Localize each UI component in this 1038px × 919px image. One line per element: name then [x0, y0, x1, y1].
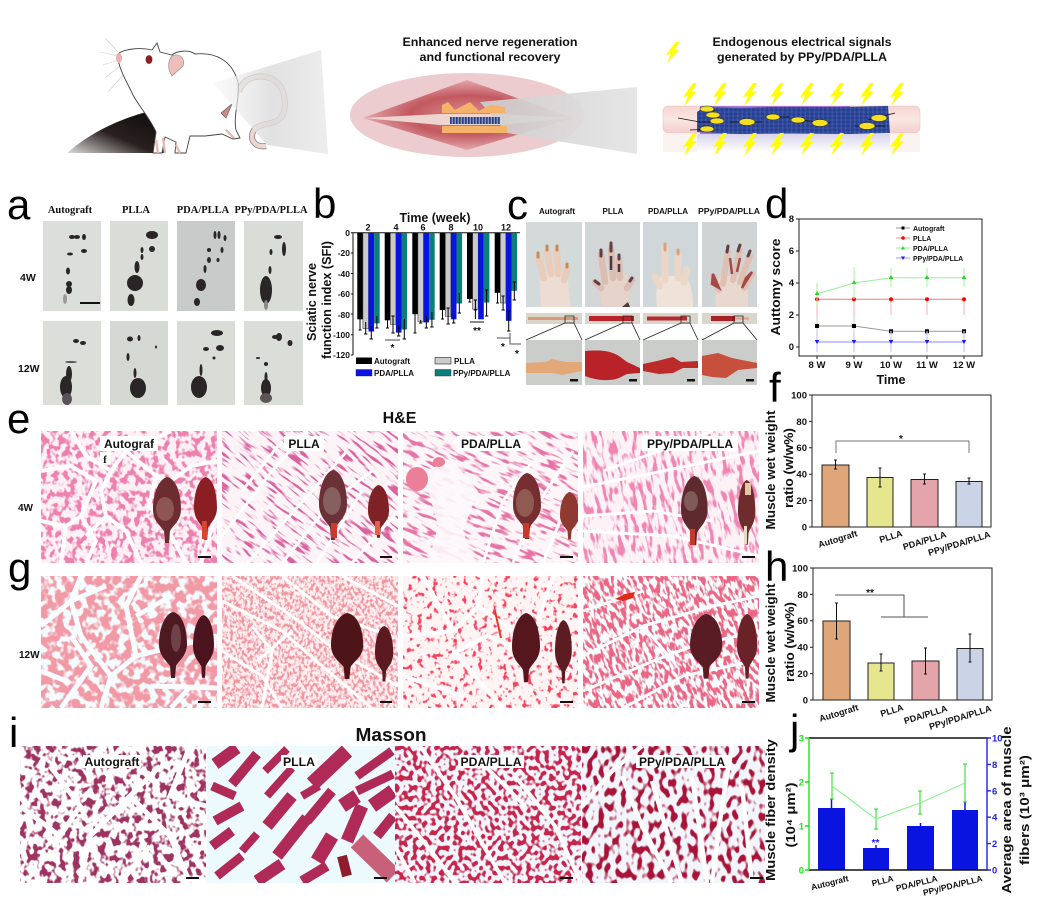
muscle specimens	[331, 613, 393, 681]
row label 12W: 12W	[18, 363, 40, 375]
week labels: 12	[501, 222, 511, 232]
lightning bolts bottom	[683, 133, 904, 156]
week labels: 10	[473, 222, 483, 232]
axons	[678, 108, 895, 130]
rat eye	[146, 55, 152, 64]
category labels: PPy/PDA/PLLA	[922, 873, 983, 898]
row label 12W: 12W	[19, 650, 40, 661]
schematic: wound with scaffold	[350, 73, 637, 157]
left axis title: (10⁴ μm²)	[783, 782, 798, 848]
legend: PDA/PLLA	[374, 369, 414, 378]
column headings: PPy/PDA/PLLA	[698, 207, 760, 216]
series PPy/PDA/PLLA	[815, 331, 966, 352]
footprint 12W autograft	[43, 321, 101, 405]
heading Masson: Masson	[356, 725, 426, 745]
week labels	[365, 222, 511, 232]
panel j: fiber density and area chart	[763, 706, 1032, 898]
pink tube	[663, 106, 920, 133]
axis ticks	[796, 219, 964, 359]
muscle specimens	[512, 613, 572, 683]
week labels: 2	[365, 222, 371, 232]
legend: PDA/PLLA	[913, 246, 948, 253]
significance bracket	[835, 588, 928, 617]
chart title: Time (week)	[400, 210, 470, 225]
scale bar	[742, 556, 755, 558]
y axis title	[763, 583, 797, 702]
image labels	[100, 436, 738, 466]
y axis ticks: -40	[338, 269, 350, 279]
left axis: 2	[799, 778, 804, 788]
y axis ticks: -20	[338, 248, 350, 258]
histology PDA/PLLA 12W	[403, 576, 578, 708]
panel c: paws and nerve photos	[507, 181, 760, 385]
green density line	[830, 764, 967, 829]
y axis ticks: -120	[333, 350, 350, 360]
rat feet	[156, 130, 234, 153]
legend: PLLA	[454, 357, 475, 366]
schematic: rat model with nerve implant	[67, 38, 328, 154]
panel f: muscle wet weight 4W	[763, 364, 992, 558]
legend: Autograft	[374, 357, 410, 366]
panel b: sciatic function index chart	[304, 180, 521, 378]
y ticks: 80	[797, 590, 808, 601]
left axis: 0	[799, 866, 804, 876]
bars	[818, 808, 978, 870]
rat incision	[221, 104, 232, 118]
image labels: PPy/PDA/PLLA	[647, 437, 733, 451]
panel g: H&E 12W histology	[8, 468, 862, 822]
right axis	[987, 734, 1003, 876]
significance marks: **	[473, 326, 481, 337]
right axis title	[999, 726, 1032, 894]
masson PDA/PLLA	[395, 746, 581, 883]
y tick labels: 8	[789, 214, 794, 225]
x tick labels	[809, 360, 975, 371]
right axis: 2	[992, 839, 997, 850]
schematic: conduit with electrical signals	[663, 83, 920, 156]
zoom boxes and connectors	[526, 316, 757, 340]
category labels: Autograft	[817, 528, 859, 550]
category labels: PLLA	[878, 528, 904, 545]
nerve strip PDA/PLLA	[643, 313, 698, 324]
heading: endogenous signals	[712, 37, 892, 64]
muscle specimens	[153, 477, 217, 543]
column headings: Autograft	[539, 207, 575, 216]
panel label j: j	[788, 706, 799, 753]
masson PLLA	[207, 746, 395, 883]
bottom scaffold	[442, 126, 507, 133]
right axis: 8	[992, 760, 997, 771]
left axis title: Muscle fiber density	[763, 738, 778, 881]
y axis ticks: -80	[338, 310, 350, 320]
y axis title: Muscle wet weight	[763, 583, 778, 702]
y tick labels: 2	[789, 310, 794, 321]
PDA/PLLA bars	[368, 233, 512, 333]
x tick labels: 10 W	[880, 360, 902, 371]
purple layer	[700, 106, 850, 134]
left axis: 1	[799, 822, 805, 832]
nerve strip autograft	[526, 313, 582, 324]
image labels: f	[103, 455, 107, 466]
category labels: PLLA	[879, 702, 905, 719]
histology PLLA 4W	[222, 431, 398, 563]
week labels: 4	[393, 222, 399, 232]
week labels: 6	[420, 222, 426, 232]
bar error bars	[832, 799, 965, 848]
histology PPy/PDA/PLLA 12W	[583, 576, 759, 708]
left axis: 3	[799, 734, 804, 744]
y tick labels: 6	[789, 246, 794, 257]
rat ear	[169, 55, 184, 76]
category labels: PDA/PLLA	[902, 529, 948, 552]
significance marks: *	[501, 342, 505, 353]
top and bottom axes	[809, 738, 987, 870]
y tick labels: 4	[789, 278, 795, 289]
column headings	[539, 207, 760, 216]
legend: PLLA	[913, 236, 931, 243]
x tick labels: 12 W	[953, 360, 975, 371]
heading: endogenous signals: Endogenous electrical signals	[712, 37, 892, 49]
row label 4W: 4W	[20, 272, 36, 284]
nerve close-up autograft	[526, 340, 582, 385]
nerve close-up PDA/PLLA	[643, 340, 698, 385]
category labels: PPy/PDA/PLLA	[928, 703, 993, 732]
category labels	[810, 873, 983, 898]
significance marks: *	[515, 349, 519, 360]
rat nose	[116, 53, 122, 63]
footprint 4W PLLA	[110, 221, 168, 311]
footprint 12W PDA/PLLA	[177, 321, 235, 405]
right axis title: Average area of muscle	[999, 726, 1014, 894]
y axis title: Auttomy score	[768, 239, 783, 335]
bars	[823, 621, 983, 700]
y ticks: 60	[796, 443, 807, 454]
significance marks: *	[391, 343, 395, 354]
y tick labels	[789, 214, 795, 353]
category labels	[817, 528, 992, 558]
y ticks: 60	[797, 616, 808, 627]
column headings	[48, 205, 308, 216]
y ticks	[791, 390, 812, 534]
series PDA/PLLA	[815, 267, 966, 305]
image labels: PLLA	[288, 437, 320, 451]
y axis ticks: -60	[338, 289, 350, 299]
y axis title: ratio (w/w%)	[781, 428, 796, 508]
plot frame	[812, 395, 991, 527]
panel label c: c	[507, 181, 528, 228]
wound centre band	[363, 114, 573, 125]
significance mark: **	[872, 838, 879, 849]
series autograft	[815, 315, 966, 337]
plot frame	[813, 568, 992, 700]
grey zoom beam from rat	[213, 50, 328, 154]
category labels: PPy/PDA/PLLA	[927, 529, 992, 558]
red vessel	[615, 592, 635, 601]
scale bar	[198, 701, 211, 703]
category labels	[818, 702, 993, 732]
scale bar	[380, 701, 392, 703]
rat body	[117, 43, 240, 153]
lightning bolts top	[683, 83, 904, 106]
nerve close-up PLLA	[585, 340, 640, 385]
x tick labels: 8 W	[809, 360, 825, 371]
bars	[822, 465, 982, 527]
nerve strip PLLA	[585, 313, 640, 324]
yellow schwann cells	[700, 106, 887, 132]
panel a: footprints	[7, 181, 308, 405]
right axis title: fibers (10³ μm²)	[1017, 755, 1032, 865]
y ticks: 40	[797, 642, 808, 654]
y ticks: 40	[796, 470, 807, 480]
category labels: PLLA	[871, 873, 894, 888]
image labels: PDA/PLLA	[461, 437, 521, 451]
error bars	[835, 603, 972, 674]
icon: lightning legend	[666, 42, 679, 63]
panel i: Masson histology	[9, 709, 765, 883]
masson PPy/PDA/PLLA	[582, 746, 765, 883]
nerve conduit	[450, 117, 500, 124]
right axis: 6	[992, 786, 997, 797]
y axis ticks: -100	[333, 330, 350, 340]
y ticks: 20	[797, 669, 808, 680]
histology autograft 12W	[41, 576, 217, 708]
chart frame	[799, 219, 982, 356]
muscle specimens	[513, 473, 579, 540]
panel label b: b	[313, 180, 336, 227]
blood vessels	[406, 467, 428, 491]
y ticks: 20	[796, 496, 807, 507]
column headings: PDA/PLLA	[177, 205, 230, 216]
y axis title: function index (SFI)	[319, 241, 334, 359]
muscle specimens	[690, 614, 757, 679]
y ticks	[792, 564, 813, 706]
image labels	[83, 755, 728, 769]
footprint 4W autograft	[43, 221, 101, 311]
grey beam	[480, 87, 637, 154]
image labels: Autograft	[84, 755, 140, 769]
column headings: Autograft	[48, 205, 93, 216]
x tick labels: 11 W	[916, 360, 938, 371]
nerve close-up PPy/PDA/PLLA	[702, 340, 757, 385]
x axis title: Time	[877, 373, 906, 387]
histology PDA/PLLA 4W	[403, 431, 578, 563]
legend: PPy/PDA/PLLA	[913, 256, 963, 263]
panel label f: f	[769, 364, 781, 411]
panel label d: d	[765, 180, 788, 227]
column headings: PDA/PLLA	[648, 207, 688, 216]
paw photo PDA/PLLA	[643, 222, 698, 307]
error bars	[358, 282, 516, 339]
scale bar	[186, 877, 199, 879]
heading: endogenous signals: generated by PPy/PDA/PLLA	[717, 52, 887, 64]
white lumen area	[423, 461, 478, 563]
scale bar	[560, 556, 573, 558]
open wound	[363, 80, 573, 150]
y axis ticks: 0	[345, 228, 350, 238]
left axis title	[763, 738, 798, 881]
histology PPy/PDA/PLLA 4W	[583, 431, 759, 563]
paw photo PPy/PDA/PLLA	[702, 222, 757, 307]
y axis title: Muscle wet weight	[763, 410, 778, 530]
column headings: PLLA	[122, 205, 150, 216]
significance bracket: **	[866, 588, 874, 599]
footprint 4W PPy/PDA/PLLA	[244, 221, 303, 311]
left axis	[799, 734, 809, 876]
y ticks: 80	[796, 417, 807, 428]
category labels: PDA/PLLA	[903, 703, 949, 726]
x tick labels: 9 W	[846, 360, 862, 371]
series PLLA	[815, 283, 966, 315]
muscle specimens	[681, 476, 755, 545]
error bars	[834, 460, 970, 487]
scale bar	[750, 877, 763, 879]
column headings: PPy/PDA/PLLA	[234, 205, 308, 216]
muscle specimens	[159, 612, 214, 678]
significance marks	[385, 322, 521, 360]
panel label e: e	[7, 395, 30, 442]
y ticks: 100	[791, 390, 807, 402]
heading: enhanced regeneration: Enhanced nerve regeneration	[402, 37, 578, 49]
legend: Autograft	[913, 226, 945, 233]
masson autograft	[20, 746, 206, 883]
row label 4W: 4W	[18, 503, 34, 514]
panel d: autotomy score line chart	[765, 180, 982, 387]
legend: PPy/PDA/PLLA	[453, 369, 511, 378]
y tick labels: 0	[789, 342, 794, 353]
image labels: Autograf	[104, 437, 155, 451]
footprint 4W PDA/PLLA	[177, 221, 235, 311]
panel label g: g	[8, 544, 31, 591]
nerve strip PPy/PDA/PLLA	[702, 313, 757, 324]
pink wound ellipse	[350, 73, 584, 157]
paw photo PLLA	[585, 222, 640, 307]
heading H&E: H&E	[383, 410, 417, 427]
rat tail	[239, 77, 285, 146]
panel label h: h	[765, 543, 788, 590]
scale bar	[560, 877, 573, 879]
whiskers	[100, 38, 124, 92]
y ticks: 0	[802, 522, 807, 534]
scale bar	[198, 556, 211, 558]
legend	[896, 226, 963, 263]
y ticks: 100	[792, 564, 808, 574]
y axis ticks	[333, 228, 520, 360]
right axis: 4	[992, 813, 998, 824]
footprint 12W PLLA	[110, 321, 168, 405]
category labels: Autograft	[810, 873, 850, 892]
column headings: PLLA	[603, 207, 624, 216]
right axis: 0	[992, 866, 997, 876]
y axis title	[304, 241, 334, 359]
image labels: PDA/PLLA	[460, 755, 522, 769]
panel h: muscle wet weight 12W	[763, 543, 993, 732]
image labels: PLLA	[283, 755, 315, 769]
y axis title	[763, 410, 796, 530]
heading: enhanced regeneration	[402, 37, 578, 64]
top scaffold	[442, 102, 505, 113]
histology PLLA 12W	[222, 576, 398, 708]
autograft bars	[357, 233, 500, 320]
y axis title: Sciatic nerve	[304, 263, 319, 341]
muscle specimens	[319, 470, 389, 540]
y ticks: 0	[803, 696, 808, 706]
scale bar	[380, 556, 392, 558]
shadow under rat	[67, 111, 165, 153]
PLLA bars	[363, 233, 506, 328]
panel label a: a	[7, 181, 31, 228]
scale bar	[374, 877, 387, 879]
legend	[356, 357, 511, 378]
category labels: PDA/PLLA	[895, 873, 938, 893]
footprint 12W PPy/PDA/PLLA	[244, 321, 303, 405]
significance bracket: *	[899, 434, 903, 445]
scale bar	[560, 701, 573, 703]
significance bracket	[836, 434, 969, 453]
histology autograft 4W	[41, 431, 217, 563]
blue nanoparticles	[697, 106, 890, 134]
heading: enhanced regeneration: and functional recovery	[420, 52, 561, 64]
paw photo autograft	[526, 222, 582, 307]
right axis: 10	[992, 734, 1003, 744]
scale bar	[742, 701, 755, 703]
conduit reflection	[663, 134, 920, 152]
image labels: PPy/PDA/PLLA	[639, 755, 725, 769]
y axis title: ratio (w/w%)	[782, 602, 797, 682]
panel e: H&E 4W histology	[7, 272, 871, 724]
panel label i: i	[9, 709, 18, 756]
crimson muscle fibres	[212, 748, 393, 881]
category labels: Autograft	[818, 702, 860, 724]
week labels: 8	[448, 222, 454, 232]
PPy/PDA/PLLA bars	[374, 233, 517, 330]
